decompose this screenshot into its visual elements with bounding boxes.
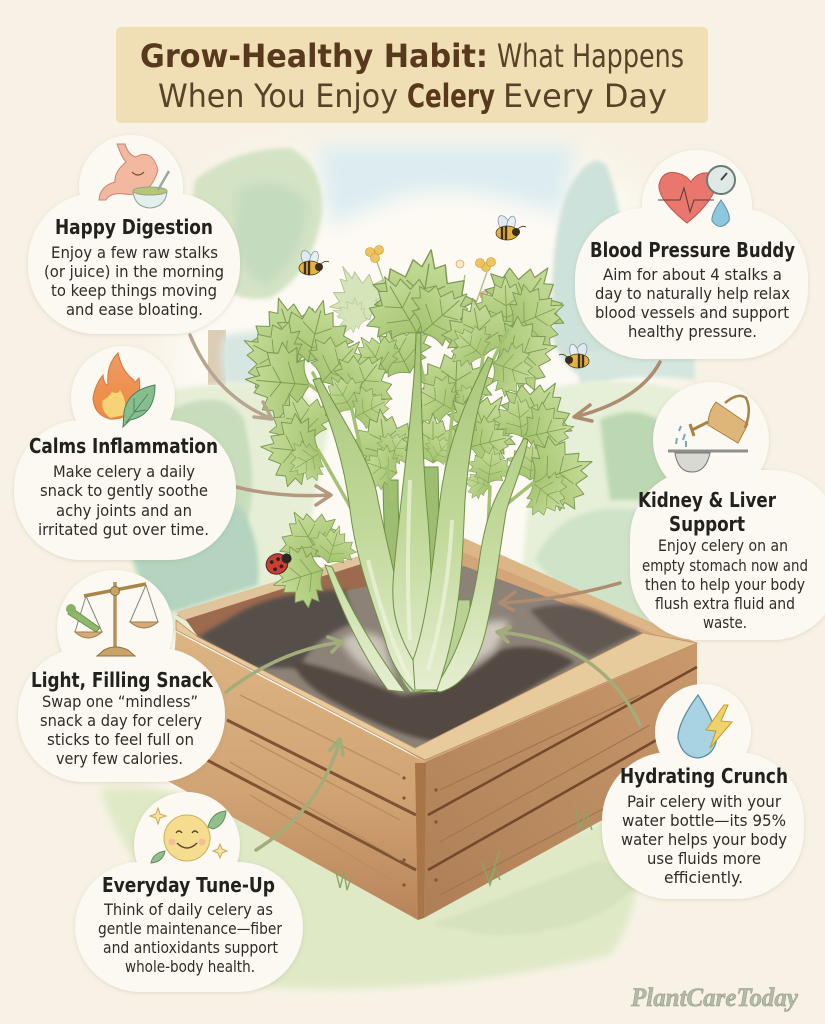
icon: heart, gauge and drop: [658, 166, 735, 226]
body text: and antioxidants support: [103, 938, 278, 957]
icon: bee left: [299, 249, 329, 275]
body text: irritated gut over time.: [38, 520, 209, 539]
corner post: [415, 763, 426, 920]
body text: Pair celery with your: [627, 792, 781, 811]
body text: snack a day for celery: [40, 711, 202, 730]
body text: use fluids more: [647, 849, 761, 868]
base filler behind stalks: [385, 600, 470, 692]
heading: Light, Filling Snack: [31, 668, 214, 692]
panel: kidney and liver support: [630, 382, 825, 640]
icon: small yellow flowers: [366, 246, 496, 299]
panel: blood pressure buddy: [575, 150, 808, 359]
arrow: kidney and liver: [500, 583, 620, 610]
nails: [402, 776, 438, 887]
body text: then to help your body: [645, 575, 805, 594]
title text: What Happens: [497, 37, 684, 75]
body text: Enjoy celery on an: [658, 536, 788, 555]
grass tufts: [335, 805, 592, 890]
celery plant: [227, 242, 605, 692]
body text: flush extra fluid and: [655, 594, 795, 613]
panel: hydrating crunch: [602, 684, 804, 899]
icon: bee right: [559, 342, 589, 368]
body text: Think of daily celery as: [103, 900, 273, 919]
body text: water bottle—its 95%: [622, 811, 786, 830]
heading: Everyday Tune-Up: [102, 873, 275, 897]
stalk highlights: [368, 480, 452, 680]
panel: calms inflammation: [14, 346, 236, 560]
body text: blood vessels and support: [595, 303, 789, 322]
body text: [40, 692, 202, 768]
body text: snack to gently soothe: [40, 481, 208, 500]
heading: Calms Inflammation: [29, 434, 218, 458]
arrow: everyday tune-up: [256, 739, 343, 850]
body text: sticks to feel full on: [47, 730, 194, 749]
heading: Support: [669, 512, 745, 536]
arrow: digestion: [190, 335, 272, 419]
title text: Celery: [407, 77, 495, 115]
stems: [310, 330, 533, 530]
soil: [198, 566, 643, 748]
watercolor garden scene: [100, 146, 695, 989]
icon: watering can and strainer: [668, 396, 749, 472]
body text: [98, 900, 282, 976]
rim: [176, 620, 697, 760]
arrow: light snack: [226, 637, 342, 692]
heading: Hydrating Crunch: [620, 764, 788, 788]
left wall planks: [166, 632, 425, 920]
title text: Every Day: [503, 77, 667, 115]
body text: [621, 792, 787, 887]
icon: bee top: [496, 214, 526, 240]
body text: Make celery a daily: [53, 462, 195, 481]
body text: (or juice) in the morning: [44, 262, 224, 281]
panel: happy digestion: [28, 135, 240, 334]
body text: whole-body health.: [125, 957, 255, 976]
icon: balance scale with celery: [66, 582, 158, 656]
title text: [140, 37, 684, 115]
arrow: hydrating: [497, 627, 640, 725]
body text: waste.: [703, 613, 747, 632]
title text: When You Enjoy: [158, 77, 398, 115]
panel: light, filling snack: [18, 570, 225, 782]
icon: ladybug: [263, 548, 296, 578]
icon: flame and leaf: [93, 353, 155, 427]
body text: gentle maintenance—fiber: [98, 919, 282, 938]
heading: Kidney & Liver: [638, 488, 776, 512]
watermark: PlantCareToday: PlantCareToday: [630, 983, 798, 1012]
title text: Grow-Healthy Habit:: [140, 37, 488, 75]
title banner: [116, 27, 708, 123]
body text: and ease bloating.: [66, 300, 203, 319]
body text: healthy pressure.: [628, 322, 757, 341]
body text: Enjoy a few raw stalks: [51, 243, 218, 262]
body text: very few calories.: [56, 749, 183, 768]
main stalks: [313, 378, 430, 692]
body text: to keep things moving: [51, 281, 217, 300]
body text: water helps your body: [621, 830, 787, 849]
inner stalks: [383, 467, 439, 640]
icon: smiling sun with leaves: [150, 808, 227, 863]
heading: [638, 488, 776, 536]
background pale leaves and flowers: [316, 246, 496, 337]
raised wooden garden bed: [166, 538, 697, 920]
leaves: [227, 242, 605, 528]
base leaves: [266, 496, 348, 573]
icon: stomach and bowl: [99, 144, 169, 208]
body text: [44, 243, 224, 319]
bed interior walls: [176, 540, 697, 762]
body text: efficiently.: [664, 868, 743, 887]
body text: [642, 536, 808, 632]
body text: day to naturally help relax: [595, 284, 790, 303]
heading: Happy Digestion: [55, 215, 213, 239]
body text: [38, 462, 209, 539]
arrow: blood pressure: [574, 362, 660, 421]
body text: achy joints and an: [56, 501, 192, 520]
panel: everyday tune-up: [75, 792, 303, 992]
arrow: inflammation: [236, 486, 331, 505]
body text: [595, 265, 790, 341]
body text: Swap one “mindless”: [42, 692, 198, 711]
right wall planks: [424, 643, 697, 918]
icon: water drop and lightning: [678, 695, 732, 758]
body text: Aim for about 4 stalks a: [603, 265, 782, 284]
